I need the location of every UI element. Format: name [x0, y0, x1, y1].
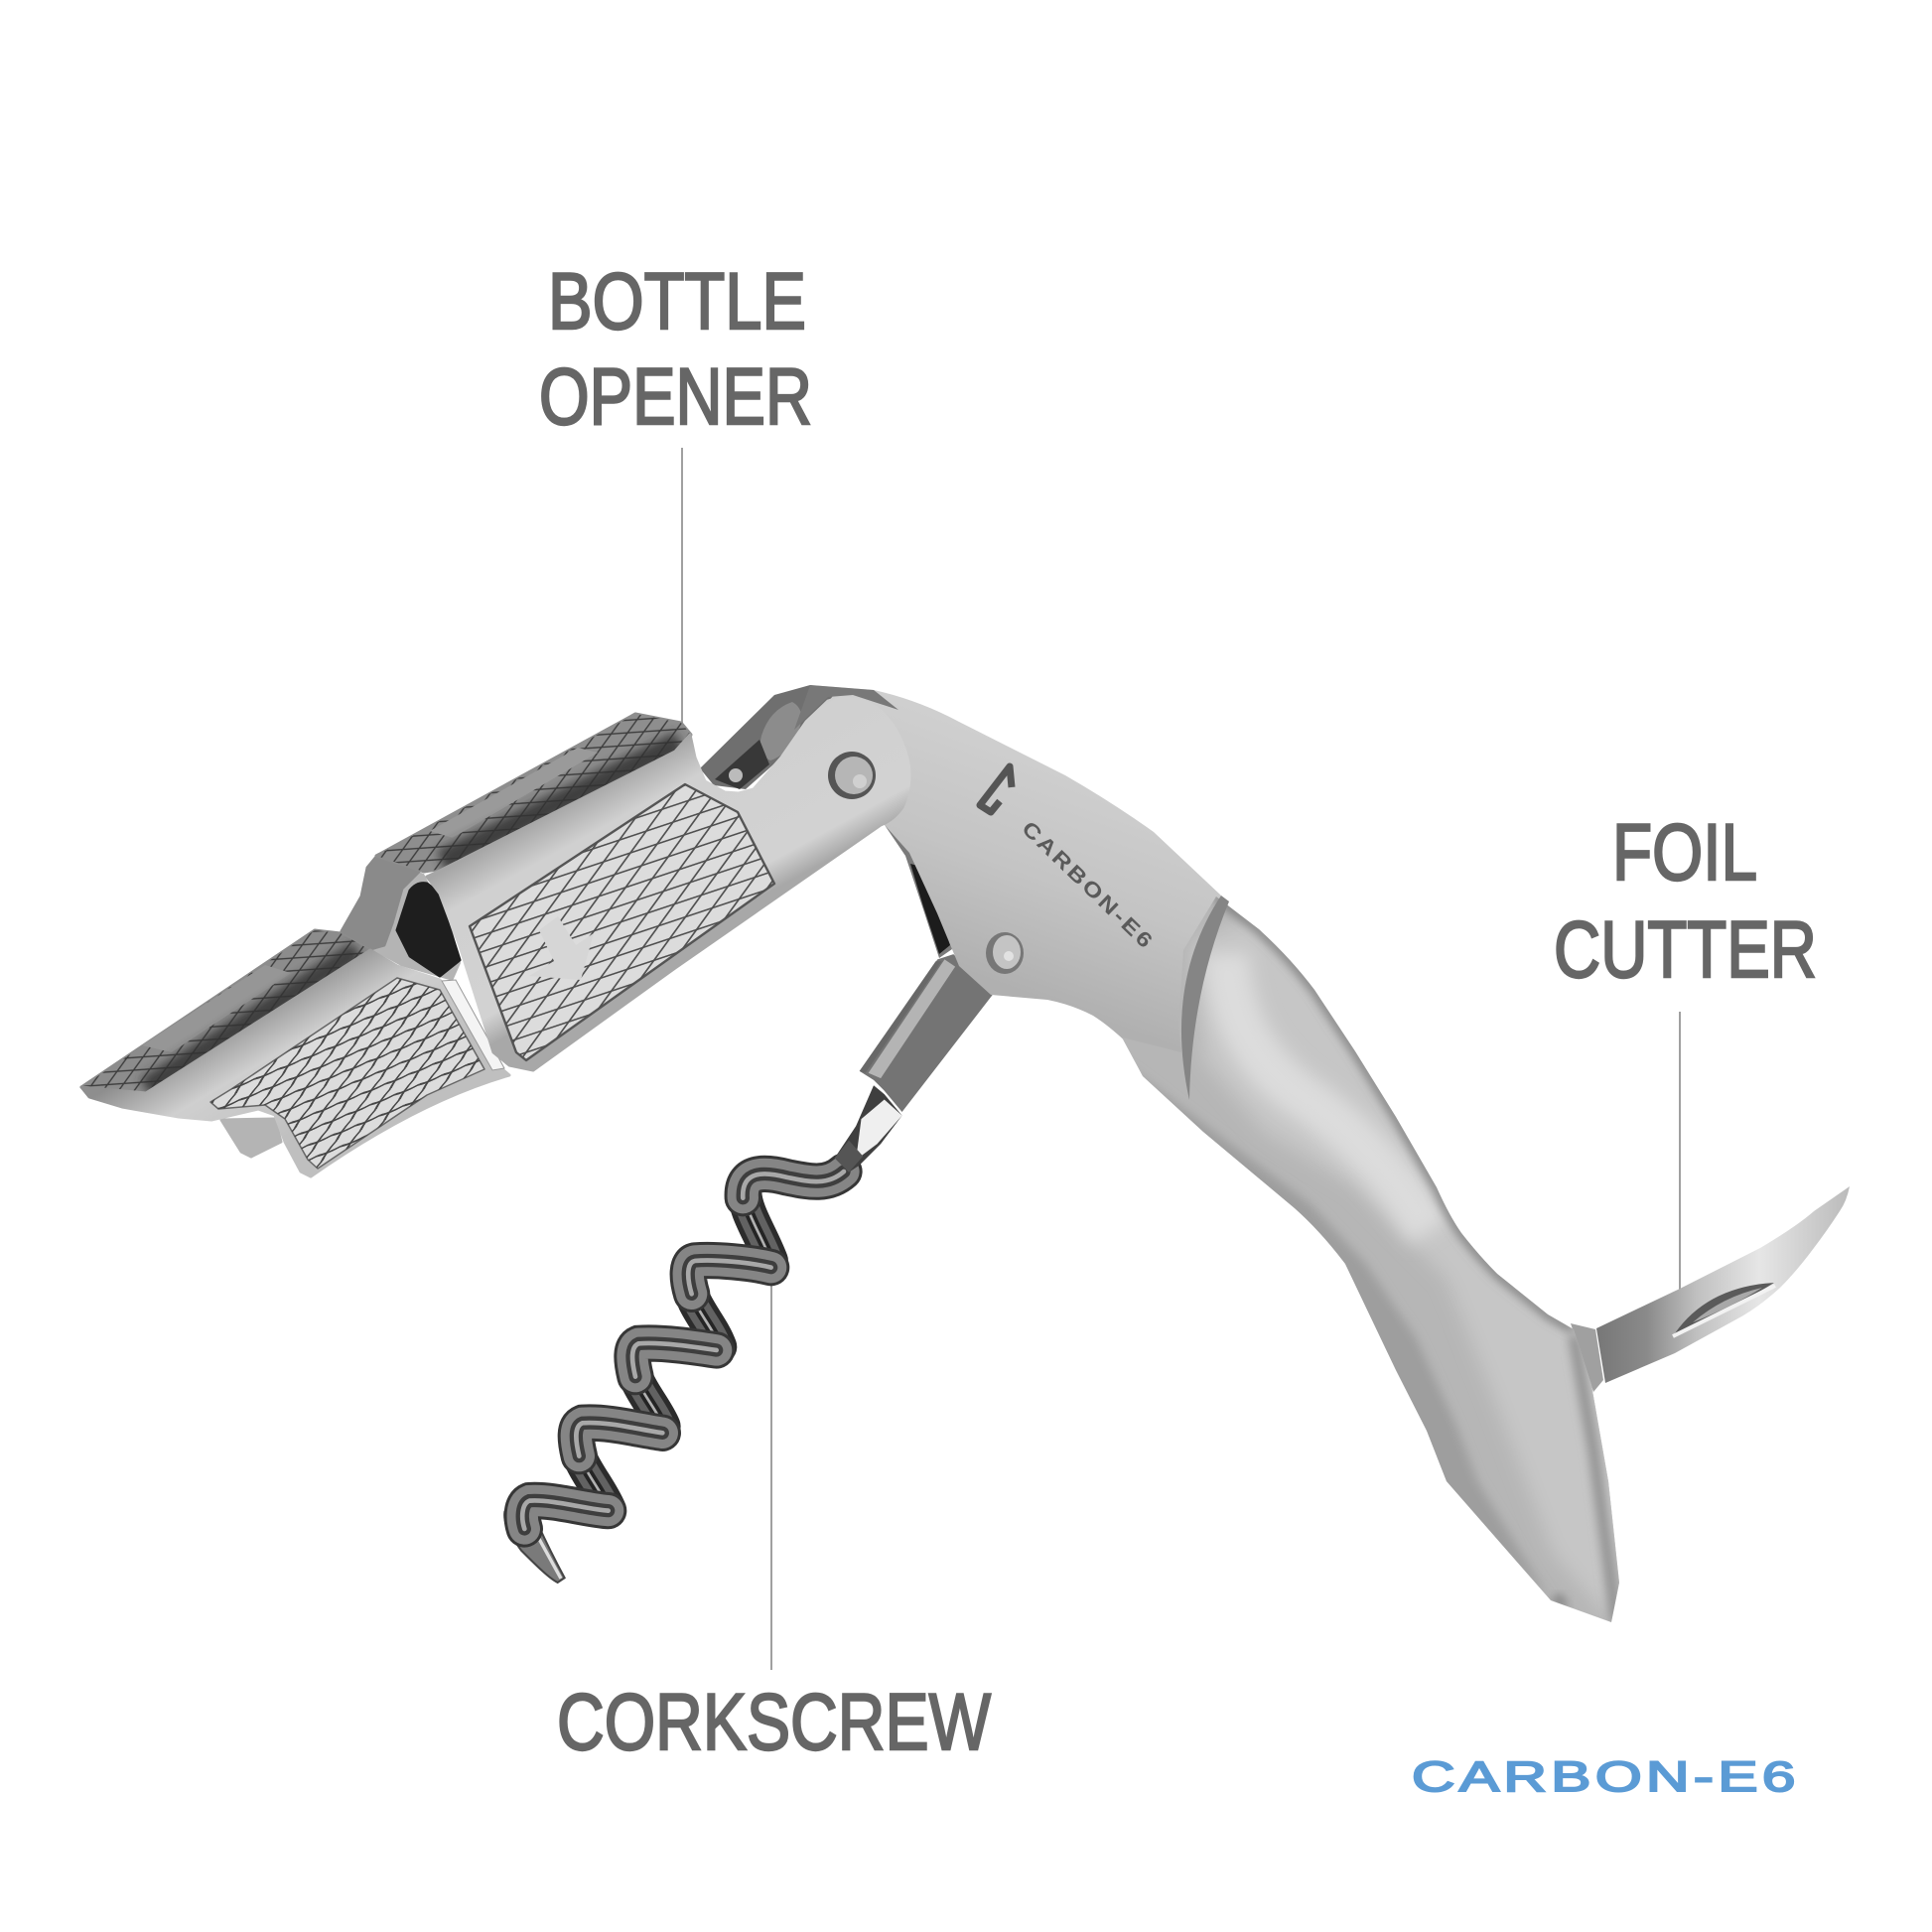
leader line: corkscrew — [770, 1281, 772, 1670]
handle grip — [1122, 894, 1638, 1622]
arrow emblem — [529, 916, 594, 980]
label: bottle opener — [539, 257, 812, 442]
jaw scale pattern — [210, 978, 484, 1169]
jaw front face — [81, 950, 509, 1176]
crescent groove — [1181, 896, 1229, 1100]
leader line: bottle opener — [681, 448, 683, 730]
label: foil cutter: FOIL — [1612, 808, 1757, 897]
label: foil cutter — [1554, 808, 1817, 995]
corkscrew spiral — [504, 1172, 844, 1583]
upper pivot pin — [828, 752, 876, 799]
lever face and head — [427, 698, 909, 1070]
label: bottle opener: OPENER — [539, 352, 812, 442]
leader line: foil cutter — [1679, 1012, 1681, 1291]
label: corkscrew: CORKSCREW — [557, 1678, 991, 1767]
lower pivot pin — [986, 932, 1024, 974]
upper section side wall — [342, 857, 419, 949]
corkscrew arm — [835, 954, 993, 1173]
engraved brand text: CARBON-E6 — [1018, 816, 1158, 952]
backing behind dark gap — [370, 857, 461, 981]
handle plate — [810, 685, 1221, 1098]
label: bottle opener: BOTTLE — [548, 257, 806, 346]
dark gap between sections — [397, 884, 460, 976]
label: foil cutter: CUTTER — [1554, 905, 1817, 995]
black slot in the liner — [910, 864, 950, 954]
brand wordmark: CARBON-E6 — [1412, 1753, 1795, 1801]
product: waiter's corkscrew — [81, 685, 1850, 1622]
rear liner arc — [885, 825, 952, 958]
hinge strip — [442, 980, 504, 1070]
logo mark on plate — [980, 766, 1012, 812]
jaw top plate with hatching — [81, 930, 370, 1094]
upper section top plate with hatching — [376, 714, 691, 872]
hook prong — [221, 1119, 281, 1157]
lever diamond grid — [470, 784, 774, 1060]
foil cutter blade — [1571, 1186, 1850, 1392]
rear spring and roller — [700, 685, 898, 789]
spiral tip — [504, 1512, 565, 1583]
